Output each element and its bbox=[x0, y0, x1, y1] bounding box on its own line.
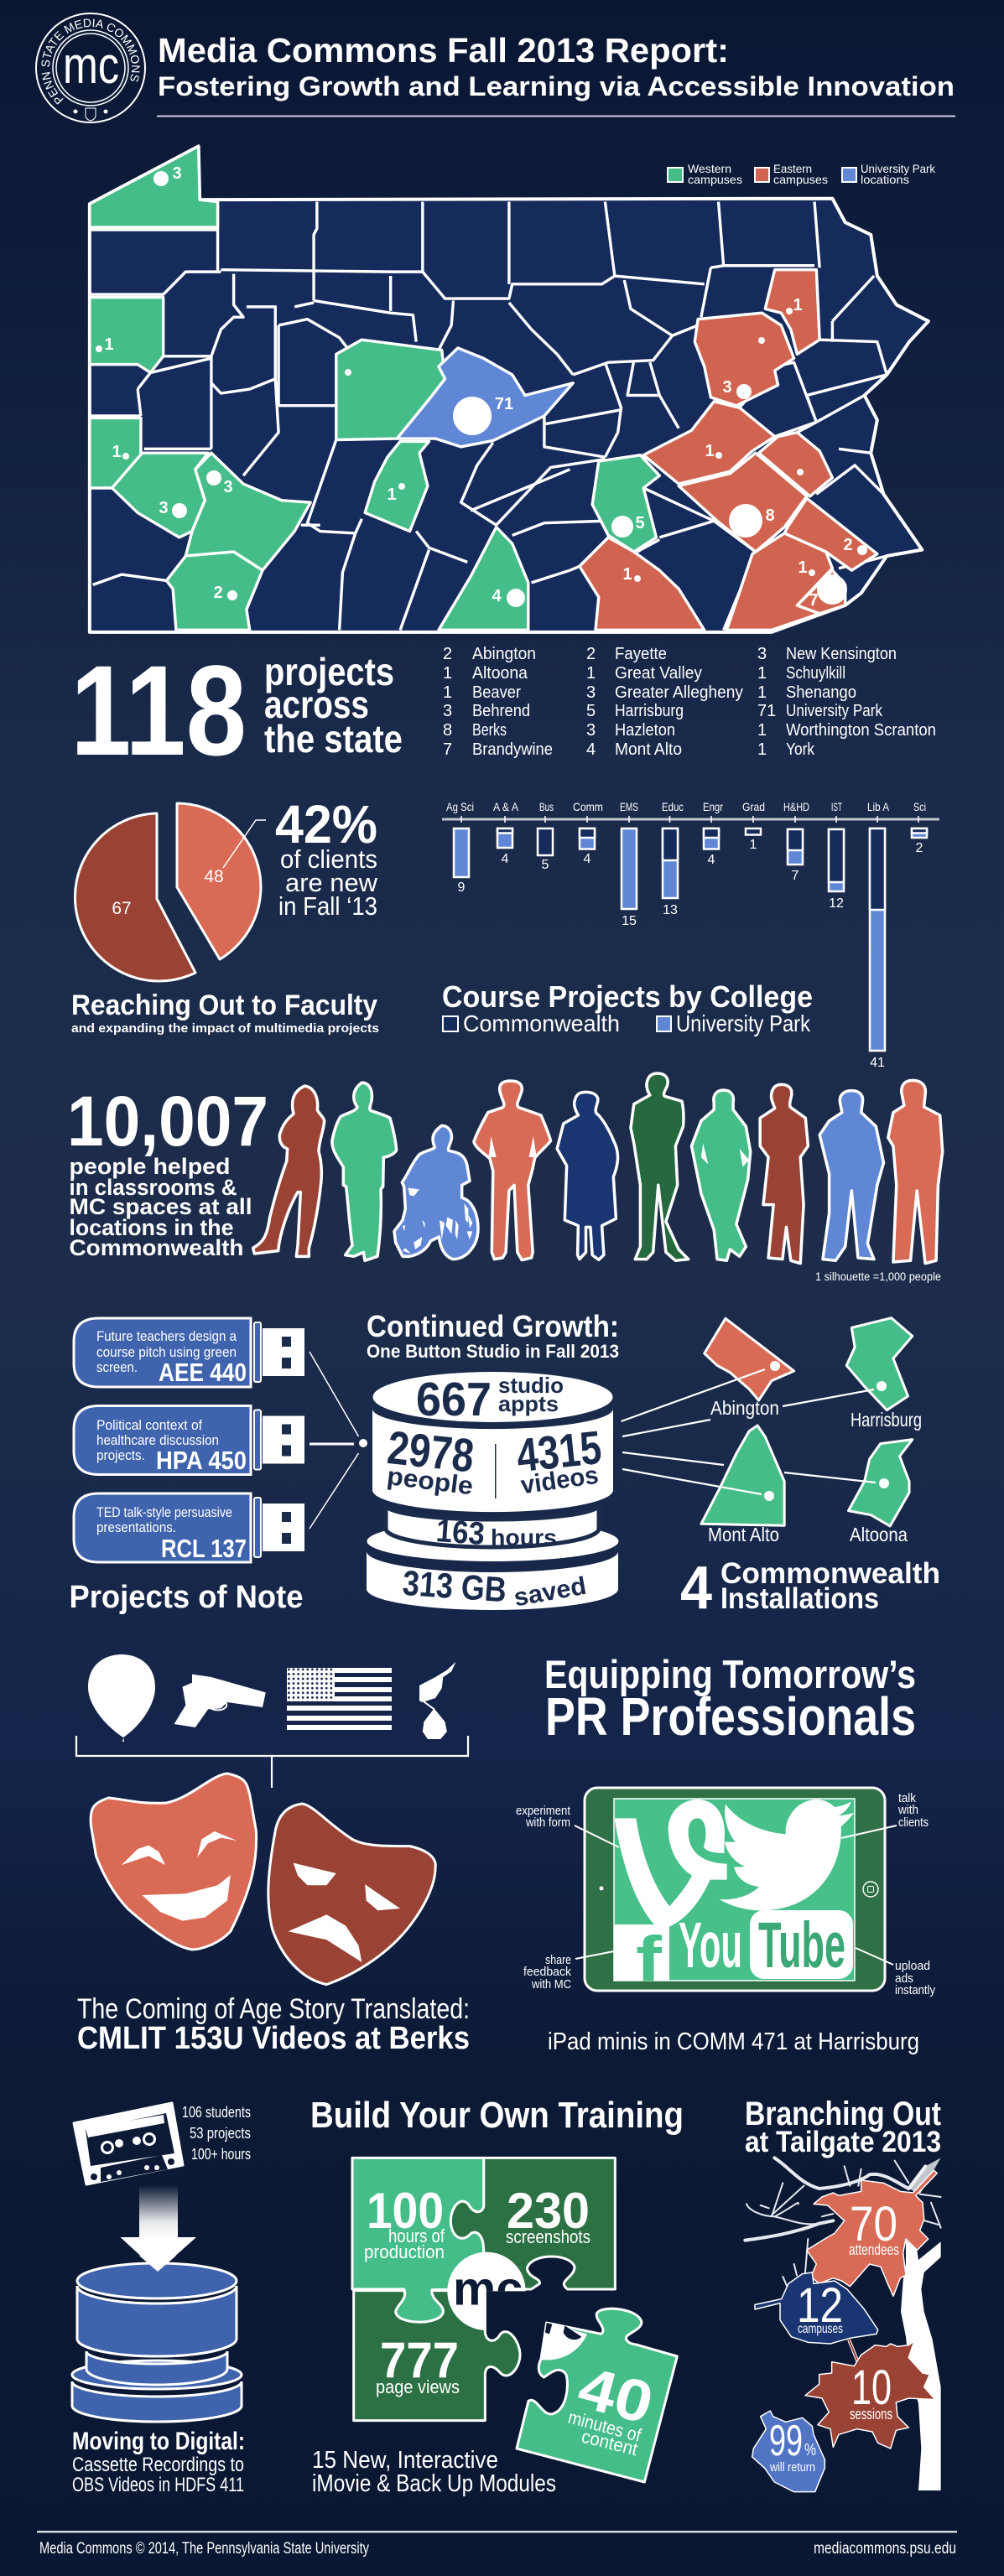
heading: 4 Commonwealth Installations: 4 bbox=[680, 1555, 712, 1622]
leaf: 99% will return bbox=[752, 2411, 825, 2492]
county shapes: Commonwealth installations: Mont Alto bbox=[708, 1524, 779, 1545]
USB drive: HPA 450: healthcare discussion bbox=[96, 1432, 219, 1448]
heading and legend: Course Projects by College: University Park bbox=[676, 1010, 811, 1036]
stat: 10,007 people helped: 10,007 bbox=[67, 1082, 268, 1161]
heading: 4 Commonwealth Installations: Installations bbox=[720, 1582, 879, 1615]
campus project list: Harrisburg bbox=[615, 702, 684, 720]
puzzle piece: 777 page views bbox=[354, 2291, 520, 2421]
heading: Branching Out at Tailgate 2013: Branching Out bbox=[745, 2096, 941, 2132]
campus project list: 1 bbox=[443, 664, 452, 683]
iPad callout labels: instantly bbox=[895, 1983, 935, 1997]
bar chart: course projects by college: A & A bbox=[493, 800, 519, 813]
campus project list: 1 bbox=[443, 683, 452, 702]
database stack: studio statistics: 667 bbox=[416, 1373, 492, 1426]
bar chart: course projects by college: 4 bbox=[708, 853, 715, 867]
heading: Reaching Out to Faculty: and expanding the impact of multimedia projects bbox=[71, 1021, 379, 1036]
stat: 10,007 people helped: in classrooms & bbox=[69, 1175, 237, 1200]
cassette statistics: 106 students bbox=[182, 2104, 251, 2121]
caption: iPad minis: iPad minis in COMM 471 at Harrisburg bbox=[548, 2028, 919, 2055]
footer: Media Commons © 2014, The Pennsylvania State University bbox=[39, 2540, 369, 2558]
iPad callout labels: upload bbox=[895, 1959, 930, 1973]
heading: Equipping Tomorrow's PR Professionals: Equipping Tomorrow’s bbox=[544, 1652, 916, 1696]
puzzle: training statistics: page views bbox=[376, 2376, 460, 2397]
bar chart: course projects by college: 12 bbox=[829, 896, 844, 911]
caption: Moving to Digital bbox=[72, 2428, 245, 2496]
county shapes: Commonwealth installations: Harrisburg bbox=[851, 1409, 922, 1431]
stat: 10,007 people helped: people helped bbox=[69, 1154, 230, 1179]
campus project list: Abington bbox=[472, 645, 536, 663]
callout: 42% of clients are new: 42% bbox=[275, 794, 377, 854]
map project counts: 2 bbox=[213, 584, 223, 602]
campus project list: 3 bbox=[586, 683, 596, 702]
leaf: 99% will return: % bbox=[804, 2441, 816, 2459]
heading: Branching Out at Tailgate 2013: at Tailgate 2013 bbox=[745, 2126, 941, 2158]
pie chart: new vs returning clients: 67 bbox=[112, 899, 132, 918]
heading: Continued Growth: Continued Growth: bbox=[367, 1309, 619, 1343]
iPad callout lines bbox=[575, 1826, 897, 1965]
map base and county lines bbox=[90, 146, 929, 632]
USB drive: HPA 450: HPA 450 bbox=[156, 1446, 247, 1475]
USB drive: AEE 440: screen. bbox=[96, 1359, 138, 1375]
footer bbox=[37, 2531, 957, 2558]
campus project list: 1 bbox=[586, 664, 596, 683]
caption: Moving to Digital: Cassette Recordings to bbox=[72, 2454, 244, 2476]
puzzle: training statistics: production bbox=[364, 2241, 445, 2262]
leaf: 70 attendees: 70 bbox=[850, 2197, 897, 2251]
icon: Facebook: f bbox=[636, 1924, 663, 1995]
campus project list: 71 bbox=[757, 702, 776, 720]
campus project list: Mont Alto bbox=[615, 740, 682, 759]
campus project list: Altoona bbox=[472, 664, 528, 683]
map project counts: 4 bbox=[492, 587, 502, 605]
icon: flag bbox=[287, 1668, 392, 1730]
silhouette: woman walking bbox=[253, 1086, 325, 1256]
bar chart: course projects by college: 4 bbox=[502, 852, 509, 866]
stat: 10,007 people helped: MC spaces at all bbox=[69, 1194, 252, 1219]
USB drive: RCL 137: TED talk-style persuasive bbox=[96, 1504, 232, 1520]
silhouette: heavyset person bbox=[819, 1091, 883, 1260]
database stack: studio statistics: studio bbox=[498, 1373, 564, 1398]
puzzle: training statistics: 777 bbox=[380, 2332, 459, 2388]
database stack: studio statistics: saved bbox=[512, 1572, 589, 1612]
campus project list: Worthington Scranton bbox=[786, 721, 936, 740]
puzzle piece: 230 screenshots bbox=[450, 2158, 615, 2289]
heading: Reaching Out to Faculty: Reaching Out to Faculty bbox=[71, 989, 377, 1021]
silhouette: person crossing legs bbox=[691, 1090, 751, 1260]
tree trunk and branches bbox=[745, 2158, 941, 2490]
campus project list: 4 bbox=[586, 740, 596, 759]
leaf: 99% will return: 99 bbox=[769, 2417, 803, 2465]
map project counts: 1 bbox=[793, 296, 803, 314]
campus project list: Schuylkill bbox=[786, 664, 845, 683]
USB drive: AEE 440: course pitch using green bbox=[96, 1344, 237, 1360]
icon: gun bbox=[174, 1675, 266, 1727]
bar chart: course projects by college: 15 bbox=[622, 914, 637, 928]
caption: CMLIT 153U: CMLIT 153U Videos at Berks bbox=[77, 2021, 470, 2056]
mask: sad bbox=[268, 1804, 435, 1985]
heading: Continued Growth: One Button Studio in Fall 2013 bbox=[367, 1341, 619, 1362]
map project counts: 2 bbox=[843, 536, 853, 554]
leaf: 10 sessions bbox=[805, 2340, 935, 2449]
silhouette: woman in dress bbox=[760, 1084, 808, 1264]
map project counts: 8 bbox=[765, 506, 775, 525]
caption: CMLIT 153U: The Coming of Age Story Translated: bbox=[77, 1993, 470, 2025]
icon: cassette tape bbox=[74, 2103, 183, 2184]
bar chart: course projects by college: Engr bbox=[703, 800, 723, 813]
headline: 118 projects across the state: across bbox=[264, 683, 369, 726]
bar chart: course projects by college bbox=[442, 800, 939, 1070]
heading: 4 Commonwealth Installations: Commonwealth bbox=[720, 1557, 940, 1590]
campus project list: Great Valley bbox=[615, 664, 702, 683]
bar chart: course projects by college: Grad bbox=[742, 800, 765, 813]
database stack: studio statistics: hours bbox=[491, 1524, 557, 1550]
caption: Moving to Digital: OBS Videos in HDFS 411 bbox=[72, 2474, 244, 2496]
map project counts: 71 bbox=[495, 395, 513, 413]
heading: Equipping Tomorrow's PR Professionals bbox=[544, 1652, 916, 1747]
campus project list: 2 bbox=[586, 645, 596, 663]
database stack: studio statistics: videos bbox=[519, 1462, 601, 1499]
USB drive: HPA 450: Political context of bbox=[96, 1417, 202, 1433]
puzzle: training statistics: screenshots bbox=[506, 2226, 590, 2247]
map project counts: 1 bbox=[104, 335, 114, 354]
bar chart: course projects by college: 4 bbox=[584, 852, 591, 866]
iPad callout labels: experiment bbox=[516, 1804, 571, 1818]
puzzle: training statistics: content bbox=[580, 2426, 640, 2459]
headline: 118 projects across the state: projects bbox=[264, 650, 394, 693]
map legend: locations bbox=[861, 173, 909, 186]
bar chart: course projects by college: Comm bbox=[573, 800, 603, 813]
leaf: 10 sessions: 10 bbox=[851, 2360, 892, 2415]
leaf: 10 sessions: sessions bbox=[850, 2406, 892, 2423]
puzzle: training statistics: hours of bbox=[388, 2225, 445, 2246]
silhouette: person with hands on hips bbox=[474, 1081, 551, 1260]
icon: Vine bbox=[615, 1800, 727, 1928]
icon: drill bbox=[419, 1662, 456, 1739]
map project counts: 1 bbox=[622, 565, 632, 584]
headline: 118 projects across the state bbox=[70, 639, 403, 782]
map legend: campuses bbox=[688, 173, 742, 186]
iPad with social media icons bbox=[516, 1788, 935, 1997]
footer: mediacommons.psu.edu bbox=[814, 2540, 956, 2558]
campus project list: York bbox=[786, 740, 815, 759]
silhouettes of people bbox=[253, 1073, 943, 1264]
tree with leaves: Tailgate statistics bbox=[745, 2158, 941, 2492]
map project counts: 7 bbox=[809, 591, 819, 610]
silhouette: man in jacket bbox=[332, 1083, 397, 1260]
theatre masks bbox=[91, 1774, 435, 1985]
map legend: Eastern bbox=[773, 162, 812, 175]
puzzle piece: 40 minutes bbox=[517, 2309, 677, 2482]
map project counts: 1 bbox=[112, 443, 122, 461]
leaf: 12 campuses: campuses bbox=[798, 2322, 843, 2336]
map legend bbox=[668, 162, 936, 186]
map legend: Western bbox=[688, 162, 731, 175]
campus project list: 1 bbox=[757, 721, 767, 740]
iPad callout labels: with bbox=[897, 1803, 918, 1817]
campus project list: 8 bbox=[443, 721, 452, 740]
campus project list: University Park bbox=[786, 702, 883, 720]
campus project list: 7 bbox=[443, 740, 452, 759]
cassette statistics: 100+ hours bbox=[191, 2146, 251, 2163]
heading: Reaching Out to Faculty bbox=[71, 989, 379, 1036]
USB drive: RCL 137: presentations. bbox=[96, 1519, 176, 1535]
iPad callout labels: feedback bbox=[523, 1965, 571, 1979]
mask: happy bbox=[91, 1774, 257, 1950]
USB drive: RCL 137: RCL 137 bbox=[161, 1534, 247, 1563]
bar chart: course projects by college: 7 bbox=[792, 869, 799, 883]
leaf: 99% will return: will return bbox=[769, 2460, 815, 2475]
icon: YouTube bbox=[679, 1909, 853, 1981]
arrow: cassette to digital bbox=[121, 2185, 196, 2272]
map project counts: 5 bbox=[635, 514, 645, 532]
campus project list: 1 bbox=[757, 740, 767, 759]
heading and legend: Course Projects by College: Commonwealth bbox=[463, 1010, 620, 1036]
database stack: studio statistics: 313 GB bbox=[402, 1563, 507, 1609]
pie chart: new vs returning clients bbox=[75, 803, 266, 981]
heading: 4 Commonwealth Installations bbox=[680, 1555, 940, 1622]
bar chart: course projects by college: Educ bbox=[662, 800, 684, 813]
puzzle: training statistics bbox=[352, 2158, 677, 2482]
iPad callout labels: with MC bbox=[531, 1977, 571, 1992]
database stack: studio statistics: 163 bbox=[434, 1514, 486, 1552]
bar chart: course projects by college: 2 bbox=[916, 841, 923, 855]
campus project list bbox=[443, 645, 936, 759]
campus project list: Greater Allegheny bbox=[615, 683, 743, 702]
silhouette: person standing bbox=[888, 1080, 943, 1264]
stat: 10,007 people helped bbox=[67, 1082, 268, 1260]
callout: 42% of clients are new: are new bbox=[285, 868, 378, 897]
campus project list: Brandywine bbox=[472, 740, 553, 759]
note: silhouette key: 1 silhouette =1,000 people bbox=[815, 1270, 941, 1283]
map project counts: 3 bbox=[159, 499, 169, 517]
database stack: studio statistics: people bbox=[386, 1462, 475, 1500]
campus project list: 1 bbox=[757, 664, 767, 683]
caption: 15 New modules bbox=[312, 2447, 556, 2497]
USB drive: RCL 137 bbox=[74, 1493, 304, 1563]
bar chart: course projects by college: Lib A bbox=[867, 800, 890, 813]
heading: Continued Growth bbox=[367, 1309, 619, 1362]
campus project list: 1 bbox=[757, 683, 767, 702]
title bbox=[157, 31, 955, 117]
leaf: 70 attendees: attendees bbox=[849, 2241, 899, 2258]
leaf: 70 attendees bbox=[807, 2170, 937, 2296]
bar chart: course projects by college: EMS bbox=[620, 800, 638, 813]
puzzle piece: 100 hours bbox=[352, 2158, 484, 2322]
campus project list: 3 bbox=[443, 702, 452, 720]
iPad callout labels bbox=[516, 1791, 935, 1997]
USB drive: HPA 450 bbox=[74, 1405, 304, 1475]
icon: Facebook bbox=[614, 1924, 669, 1995]
bar chart: course projects by college: IST bbox=[831, 800, 842, 813]
heading: Equipping Tomorrow's PR Professionals: PR Professionals bbox=[545, 1686, 916, 1747]
cassette statistics bbox=[182, 2104, 251, 2163]
leaf: 12 campuses: 12 bbox=[797, 2278, 843, 2333]
stat: 10,007 people helped: Commonwealth bbox=[69, 1235, 243, 1260]
iPad callout labels: share bbox=[545, 1953, 571, 1967]
headline: 118 projects across the state: 118 bbox=[70, 639, 247, 782]
database stack: studio statistics: 2978 bbox=[385, 1420, 476, 1482]
campus project list: 5 bbox=[586, 702, 596, 720]
title: Fostering Growth and Learning via Accessible Innovation bbox=[158, 71, 955, 101]
caption: 15 New modules: 15 New, Interactive bbox=[312, 2447, 498, 2474]
bar chart: course projects by college: 13 bbox=[663, 903, 678, 917]
title: Media Commons Fall 2013 Report: bbox=[158, 31, 729, 70]
county shapes: Commonwealth installations bbox=[621, 1318, 922, 1545]
map legend: campuses bbox=[773, 173, 828, 186]
bar chart: course projects by college: Sci bbox=[913, 800, 926, 813]
campus project list: Shenango bbox=[786, 683, 856, 702]
headline: 118 projects across the state: the state bbox=[264, 717, 403, 761]
stat: 10,007 people helped: locations in the bbox=[69, 1215, 233, 1240]
silhouette: person in wheelchair bbox=[394, 1125, 478, 1259]
iPad callout labels: ads bbox=[895, 1971, 913, 1986]
bar chart: course projects by college: H&HD bbox=[783, 800, 809, 813]
USB drive: HPA 450: projects. bbox=[96, 1447, 145, 1463]
county shapes: Commonwealth installations: Altoona bbox=[850, 1524, 908, 1545]
logo: Penn State Media Commons seal: mc bbox=[63, 37, 119, 95]
campus project list: Behrend bbox=[472, 702, 530, 720]
USB drives: projects of note bbox=[74, 1318, 304, 1563]
bar chart: course projects by college: Ag Sci bbox=[446, 800, 474, 813]
icons: balloon, gun, flag, drill bbox=[88, 1654, 456, 1742]
campus project list: 3 bbox=[757, 645, 767, 663]
puzzle centre logo: mc bbox=[453, 2262, 523, 2315]
icon: balloon bbox=[88, 1654, 155, 1742]
puzzle: training statistics: 230 bbox=[507, 2183, 590, 2239]
database cylinder: digital storage bbox=[72, 2263, 242, 2422]
heading and legend: Course Projects by College bbox=[442, 979, 813, 1036]
iPad callout labels: with form bbox=[525, 1815, 570, 1830]
icon: YouTube: You bbox=[679, 1909, 742, 1981]
cassette statistics: 53 projects bbox=[190, 2125, 251, 2142]
puzzle: training statistics: 40 bbox=[572, 2354, 660, 2436]
map project counts: 3 bbox=[722, 378, 732, 397]
campus project list: Hazleton bbox=[615, 721, 675, 740]
USB drive: AEE 440: Future teachers design a bbox=[96, 1328, 237, 1344]
puzzle: training statistics: 100 bbox=[367, 2183, 444, 2239]
map project counts: 1 bbox=[798, 558, 808, 577]
map legend: University Park bbox=[861, 162, 936, 175]
callout: 42% of clients are new bbox=[275, 794, 378, 921]
callout: 42% of clients are new: of clients bbox=[280, 844, 377, 874]
silhouette: tall man bbox=[631, 1073, 689, 1260]
connector lines from USB drives bbox=[310, 1352, 367, 1529]
pie chart: new vs returning clients: 48 bbox=[204, 867, 224, 886]
campus project list: 3 bbox=[586, 721, 596, 740]
map project counts bbox=[104, 164, 853, 610]
campus project list: Beaver bbox=[472, 683, 521, 702]
campus project list: Fayette bbox=[615, 645, 667, 663]
bar chart: course projects by college: 9 bbox=[458, 880, 466, 895]
caption: CMLIT 153U bbox=[77, 1993, 470, 2056]
USB drive: AEE 440 bbox=[74, 1318, 304, 1387]
map project counts: 3 bbox=[172, 164, 182, 183]
heading: Projects of Note: Projects of Note bbox=[69, 1580, 304, 1615]
caption: 15 New modules: iMovie & Back Up Modules bbox=[312, 2470, 556, 2497]
campus project list: 2 bbox=[443, 645, 452, 663]
map location dots bbox=[96, 171, 867, 607]
bracket connecting icons to masks bbox=[76, 1736, 468, 1788]
arrow tip over cylinder bbox=[139, 2256, 176, 2272]
heading and legend: Course Projects by College: Course Projects by College bbox=[442, 979, 813, 1014]
caption: Moving to Digital: Moving to Digital: bbox=[72, 2428, 245, 2455]
silhouette: woman in skirt bbox=[557, 1092, 618, 1259]
iPad callout labels: talk bbox=[898, 1791, 916, 1805]
leaf: 12 campuses bbox=[755, 2272, 878, 2344]
map project counts: 1 bbox=[387, 486, 397, 504]
database stack: studio statistics: appts bbox=[498, 1391, 559, 1416]
heading: Build Your Own Training: Build Your Own Training bbox=[310, 2095, 684, 2136]
bar chart: course projects by college: 1 bbox=[750, 838, 757, 852]
heading: Branching Out at Tailgate 2013 bbox=[745, 2096, 941, 2158]
database stack: studio statistics: 4315 bbox=[514, 1420, 604, 1482]
bar chart: course projects by college: Bus bbox=[539, 800, 554, 813]
puzzle: training statistics: minutes of bbox=[566, 2407, 644, 2446]
database stack: studio statistics bbox=[367, 1372, 619, 1612]
map of Pennsylvania campuses bbox=[90, 146, 936, 632]
puzzle centre logo bbox=[447, 2252, 526, 2330]
callout: 42% of clients are new: in Fall ‘13 bbox=[278, 891, 377, 921]
map project counts: 1 bbox=[705, 442, 715, 460]
icon: YouTube: Tube bbox=[758, 1909, 845, 1981]
iPad callout labels: clients bbox=[898, 1815, 929, 1830]
campus project list: New Kensington bbox=[786, 645, 897, 663]
logo: Penn State Media Commons seal: PENN STATE MEDIA COMMONS bbox=[42, 18, 140, 105]
bar chart: course projects by college: 41 bbox=[870, 1056, 885, 1070]
icon: Twitter bird bbox=[719, 1800, 854, 1910]
map project counts: 3 bbox=[223, 478, 233, 496]
USB drive: AEE 440: AEE 440 bbox=[159, 1358, 247, 1387]
bar chart: course projects by college: 5 bbox=[542, 858, 549, 872]
campus project list: Berks bbox=[472, 721, 507, 740]
county shapes: Commonwealth installations: Abington bbox=[710, 1397, 779, 1419]
